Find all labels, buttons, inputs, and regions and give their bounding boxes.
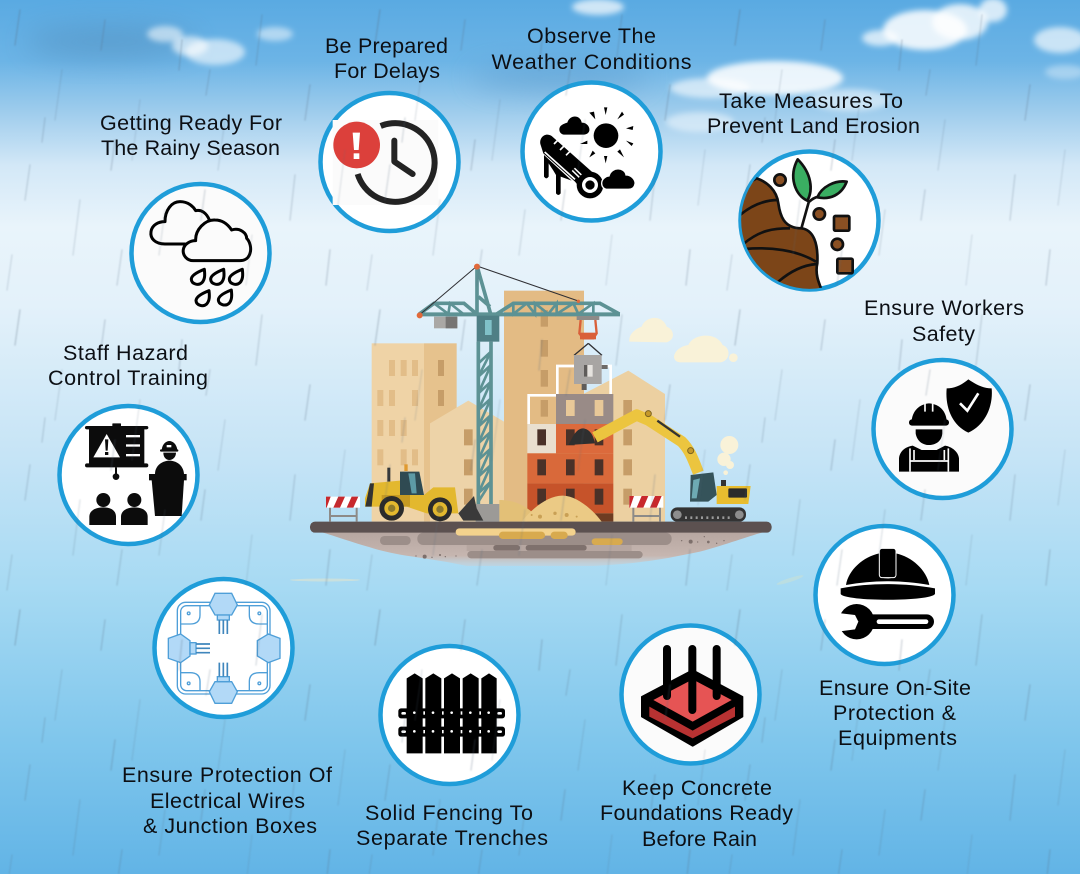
label: Getting Ready For The Rainy Season: Getting Ready For xyxy=(100,111,282,135)
badge: staff training xyxy=(60,406,198,544)
label: Ensure Protection Of Electrical Wires and Junction Boxes xyxy=(122,763,332,838)
buildings xyxy=(372,291,665,522)
badge: delays xyxy=(320,93,458,231)
badge: land erosion xyxy=(730,152,878,297)
label: Ensure Protection Of Electrical Wires and Junction Boxes: Electrical Wires xyxy=(150,789,305,813)
label: Ensure Protection Of Electrical Wires and Junction Boxes: & Junction Boxes xyxy=(143,814,317,838)
label: Ensure Protection Of Electrical Wires and Junction Boxes: Ensure Protection Of xyxy=(122,763,332,787)
label: Staff Hazard Control Training: Staff Hazard xyxy=(63,341,188,365)
tower crane xyxy=(417,264,620,522)
icon: electrical junction box xyxy=(168,593,280,703)
label: Be Prepared For Delays: Be Prepared xyxy=(325,34,448,58)
label: Take Measures To Prevent Land Erosion: Prevent Land Erosion xyxy=(707,114,920,138)
label: Ensure Workers Safety: Ensure Workers xyxy=(864,296,1024,320)
icon: thermometer, sun and clouds xyxy=(540,107,635,198)
label: Ensure On-Site Protection and Equipments xyxy=(819,676,971,750)
badge: workers safety xyxy=(874,360,1012,498)
label: Ensure On-Site Protection and Equipments: Protection & xyxy=(833,701,956,725)
badge: fencing xyxy=(380,646,518,784)
label: Keep Concrete Foundations Ready Before Rain: Before Rain xyxy=(642,827,757,851)
badge: junction box xyxy=(154,579,292,717)
label: Solid Fencing To Separate Trenches: Separate Trenches xyxy=(356,826,548,850)
icon: worker with shield xyxy=(899,379,992,472)
icon: hard hat and wrench xyxy=(835,548,935,639)
badge: on-site protection xyxy=(816,526,954,664)
label: Solid Fencing To Separate Trenches xyxy=(356,801,548,850)
badge: concrete foundations xyxy=(622,626,760,764)
icon: clock with red alert xyxy=(333,120,438,205)
road and floating ground xyxy=(310,522,772,566)
label: Observe The Weather Conditions: Observe The xyxy=(527,24,656,48)
label: Observe The Weather Conditions: Weather Conditions xyxy=(492,50,692,74)
label: Be Prepared For Delays xyxy=(325,34,448,83)
label: Keep Concrete Foundations Ready Before Rain: Foundations Ready xyxy=(600,801,793,825)
icon: picket fence xyxy=(398,673,505,753)
central construction site illustration xyxy=(310,264,772,566)
label: Ensure Workers Safety xyxy=(864,296,1024,346)
badge: weather xyxy=(522,82,660,220)
label: Keep Concrete Foundations Ready Before Rain: Keep Concrete xyxy=(622,776,772,800)
label: Keep Concrete Foundations Ready Before Rain xyxy=(600,776,793,851)
label: Observe The Weather Conditions xyxy=(492,24,692,74)
icon: eroding soil and sprout xyxy=(741,158,854,289)
crane hook with concrete block xyxy=(574,316,608,390)
icon: concrete foundation block with rods xyxy=(642,649,743,746)
excavator xyxy=(568,411,751,522)
label: Take Measures To Prevent Land Erosion: Take Measures To xyxy=(719,89,903,113)
building under construction xyxy=(527,366,613,522)
label: Staff Hazard Control Training xyxy=(48,341,208,390)
wheel loader xyxy=(365,464,483,521)
icon: clouds with rain drops xyxy=(151,202,251,306)
label: Be Prepared For Delays: For Delays xyxy=(334,59,440,83)
label: Take Measures To Prevent Land Erosion xyxy=(707,89,920,138)
label: Staff Hazard Control Training: Control Training xyxy=(48,366,208,390)
road barriers xyxy=(326,496,663,522)
label: Solid Fencing To Separate Trenches: Solid Fencing To xyxy=(365,801,533,825)
badge: rainy clouds xyxy=(132,184,270,322)
label: Ensure On-Site Protection and Equipments: Ensure On-Site xyxy=(819,676,971,700)
label: Ensure Workers Safety: Safety xyxy=(912,322,975,346)
label: Getting Ready For The Rainy Season: The Rainy Season xyxy=(101,136,280,160)
smoke and clouds xyxy=(629,318,738,475)
icon: hazard presentation xyxy=(85,423,187,525)
sand piles xyxy=(499,496,602,522)
label: Getting Ready For The Rainy Season xyxy=(100,111,282,160)
label: Ensure On-Site Protection and Equipments: Equipments xyxy=(838,726,957,750)
